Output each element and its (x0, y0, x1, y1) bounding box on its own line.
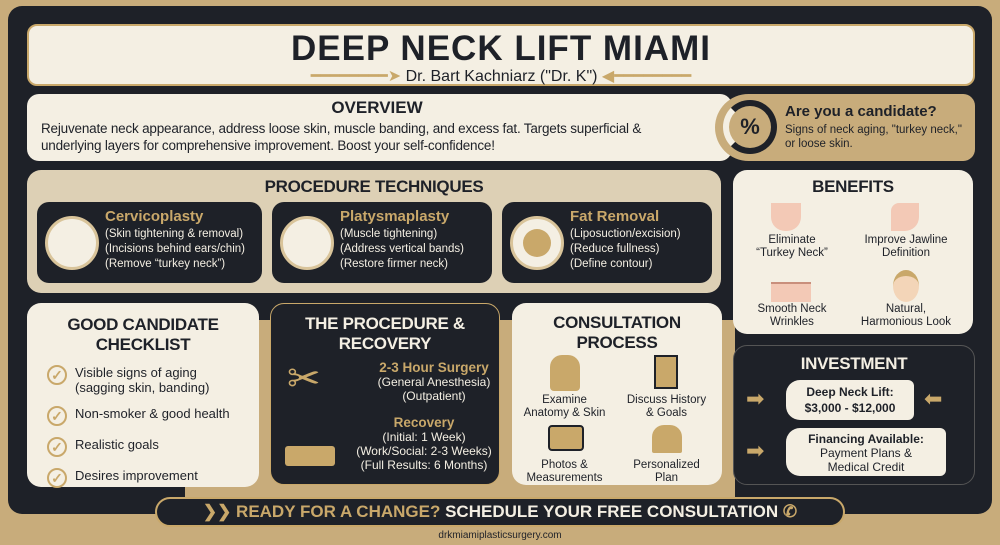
panel: good candidate checklist: Desires improvement (75, 468, 198, 483)
tag: financing (786, 428, 946, 476)
tag: price: $3,000 - $12,000 (805, 401, 895, 415)
icon: jaw (891, 203, 919, 231)
panel: consultation process: Anatomy & Skin (524, 407, 605, 419)
panel: good candidate checklist: ✓ (51, 408, 63, 424)
panel: procedure & recovery: (Initial: 1 Week) (382, 430, 466, 444)
icon: scissors clock: ✂ (287, 357, 321, 401)
panel: procedure & recovery: THE PROCEDURE & (305, 314, 465, 333)
panel: benefits: “Turkey Neck” (756, 247, 828, 259)
panel: good candidate checklist: GOOD CANDIDATE (67, 315, 219, 334)
card: platysmaplasty: (Restore firmer neck) (340, 258, 448, 270)
icon: neck (771, 203, 801, 231)
card: platysmaplasty: (Muscle tightening) (340, 228, 437, 240)
card: cervicoplasty: (Incisions behind ears/chin) (105, 243, 245, 255)
tag: financing: Financing Available: (808, 432, 924, 446)
panel: benefits: Smooth Neck (757, 303, 827, 315)
title: DEEP NECK LIFT MIAMI (291, 29, 711, 68)
icon: skin (771, 282, 811, 302)
panel: benefits (733, 170, 973, 334)
panel: good candidate checklist: ✓ (51, 367, 63, 383)
panel: good candidate checklist: Realistic goals (75, 437, 159, 452)
panel: procedure & recovery: (General Anesthesia) (378, 375, 490, 389)
panel: procedure techniques (27, 170, 721, 293)
panel: good candidate checklist: ✓ (51, 439, 63, 455)
panel: investment (733, 345, 975, 485)
card: platysmaplasty: Platysmaplasty (340, 208, 449, 225)
tag: financing: Medical Credit (828, 460, 904, 474)
panel: benefits: Definition (882, 247, 930, 259)
panel: consultation process: Photos & (541, 459, 588, 471)
card: cervicoplasty: (Skin tightening & removal) (105, 228, 243, 240)
card: cervicoplasty (37, 202, 262, 283)
panel: consultation process (512, 303, 722, 485)
panel: overview (27, 94, 732, 161)
card: platysmaplasty: (Address vertical bands) (340, 243, 464, 255)
panel: good candidate checklist: Visible signs of aging (75, 365, 197, 380)
panel: consultation process: Measurements (526, 472, 603, 484)
panel: benefits: Wrinkles (770, 316, 814, 328)
callout: candidate: Signs of neck aging, "turkey neck," or loose skin. (785, 124, 962, 150)
panel: good candidate checklist (27, 303, 259, 487)
panel: good candidate checklist: ✓ (51, 470, 63, 486)
panel: consultation process: Plan (655, 472, 678, 484)
tag: price (786, 380, 914, 420)
CTA bar: ❯❯ READY FOR A CHANGE? SCHEDULE YOUR FREE CONSULTATION ✆ (203, 502, 797, 521)
panel: consultation process: PROCESS (576, 333, 658, 352)
card: cervicoplasty: (Remove “turkey neck”) (105, 258, 225, 270)
panel: procedure & recovery: (Full Results: 6 Months) (361, 458, 487, 472)
panel: procedure & recovery: Recovery (394, 415, 454, 430)
panel: procedure & recovery: (Outpatient) (402, 389, 466, 403)
card: cervicoplasty: Cervicoplasty (105, 208, 203, 225)
panel: benefits: Improve Jawline (864, 234, 948, 246)
tag: price: Deep Neck Lift: (806, 385, 894, 399)
url: drkmiamiplasticsurgery.com (438, 530, 562, 541)
panel: benefits: Harmonious Look (861, 316, 951, 328)
panel: consultation process: Examine (542, 394, 587, 406)
CTA bar (155, 497, 845, 527)
icon: percent ring (723, 100, 777, 154)
icon: percent ring: % (740, 114, 760, 139)
tan band behind lower cards (185, 320, 735, 510)
subtitle with arrows: ━━━━━━━━➤ Dr. Bart Kachniarz ("Dr. K") ◀━━━━━━━━ (311, 68, 691, 85)
overview heading: OVERVIEW (331, 98, 423, 117)
card: fat removal: (Reduce fullness) (570, 243, 659, 255)
card: fat removal (502, 202, 712, 283)
panel: benefits: Natural, (886, 303, 926, 315)
panel: consultation process: & Goals (646, 407, 687, 419)
panel: consultation process: CONSULTATION (553, 313, 681, 332)
overview text: Rejuvenate neck appearance, address loose skin, muscle banding, and excess fat. Targets superficial & underlying layers for comprehensive improvement. Boost your self-confidence! (41, 121, 641, 153)
panel: procedure & recovery: (Work/Social: 2-3 Weeks) (356, 444, 492, 458)
icon: bed (285, 446, 335, 466)
panel: consultation process: Personalized (633, 459, 700, 471)
panel: investment: ➡ (746, 386, 764, 411)
callout: candidate (715, 94, 975, 161)
panel: procedure & recovery (270, 303, 500, 485)
panel: benefits: BENEFITS (812, 177, 894, 196)
card: platysmaplasty (272, 202, 492, 283)
panel: investment: ➡ (746, 438, 764, 463)
card: fat removal: (Define contour) (570, 258, 652, 270)
icon: face (893, 270, 919, 302)
panel: consultation process: Discuss History (627, 394, 706, 406)
title card (27, 24, 975, 86)
panel: procedure & recovery: RECOVERY (339, 334, 431, 353)
card: fat removal: (Liposuction/excision) (570, 228, 681, 240)
heading: PROCEDURE TECHNIQUES (265, 177, 483, 196)
panel: investment: INVESTMENT (801, 354, 907, 373)
panel: good candidate checklist: Non-smoker & good health (75, 406, 230, 421)
panel: good candidate checklist: (sagging skin, banding) (75, 380, 209, 395)
panel: good candidate checklist: CHECKLIST (96, 335, 190, 354)
tag: financing: Payment Plans & (820, 446, 912, 460)
callout: candidate: Are you a candidate? (785, 103, 937, 120)
panel: benefits: Eliminate (768, 234, 816, 246)
panel: procedure & recovery: 2-3 Hour Surgery (379, 360, 489, 375)
panel: investment: ⬅ (924, 386, 942, 411)
card: fat removal: Fat Removal (570, 208, 659, 225)
